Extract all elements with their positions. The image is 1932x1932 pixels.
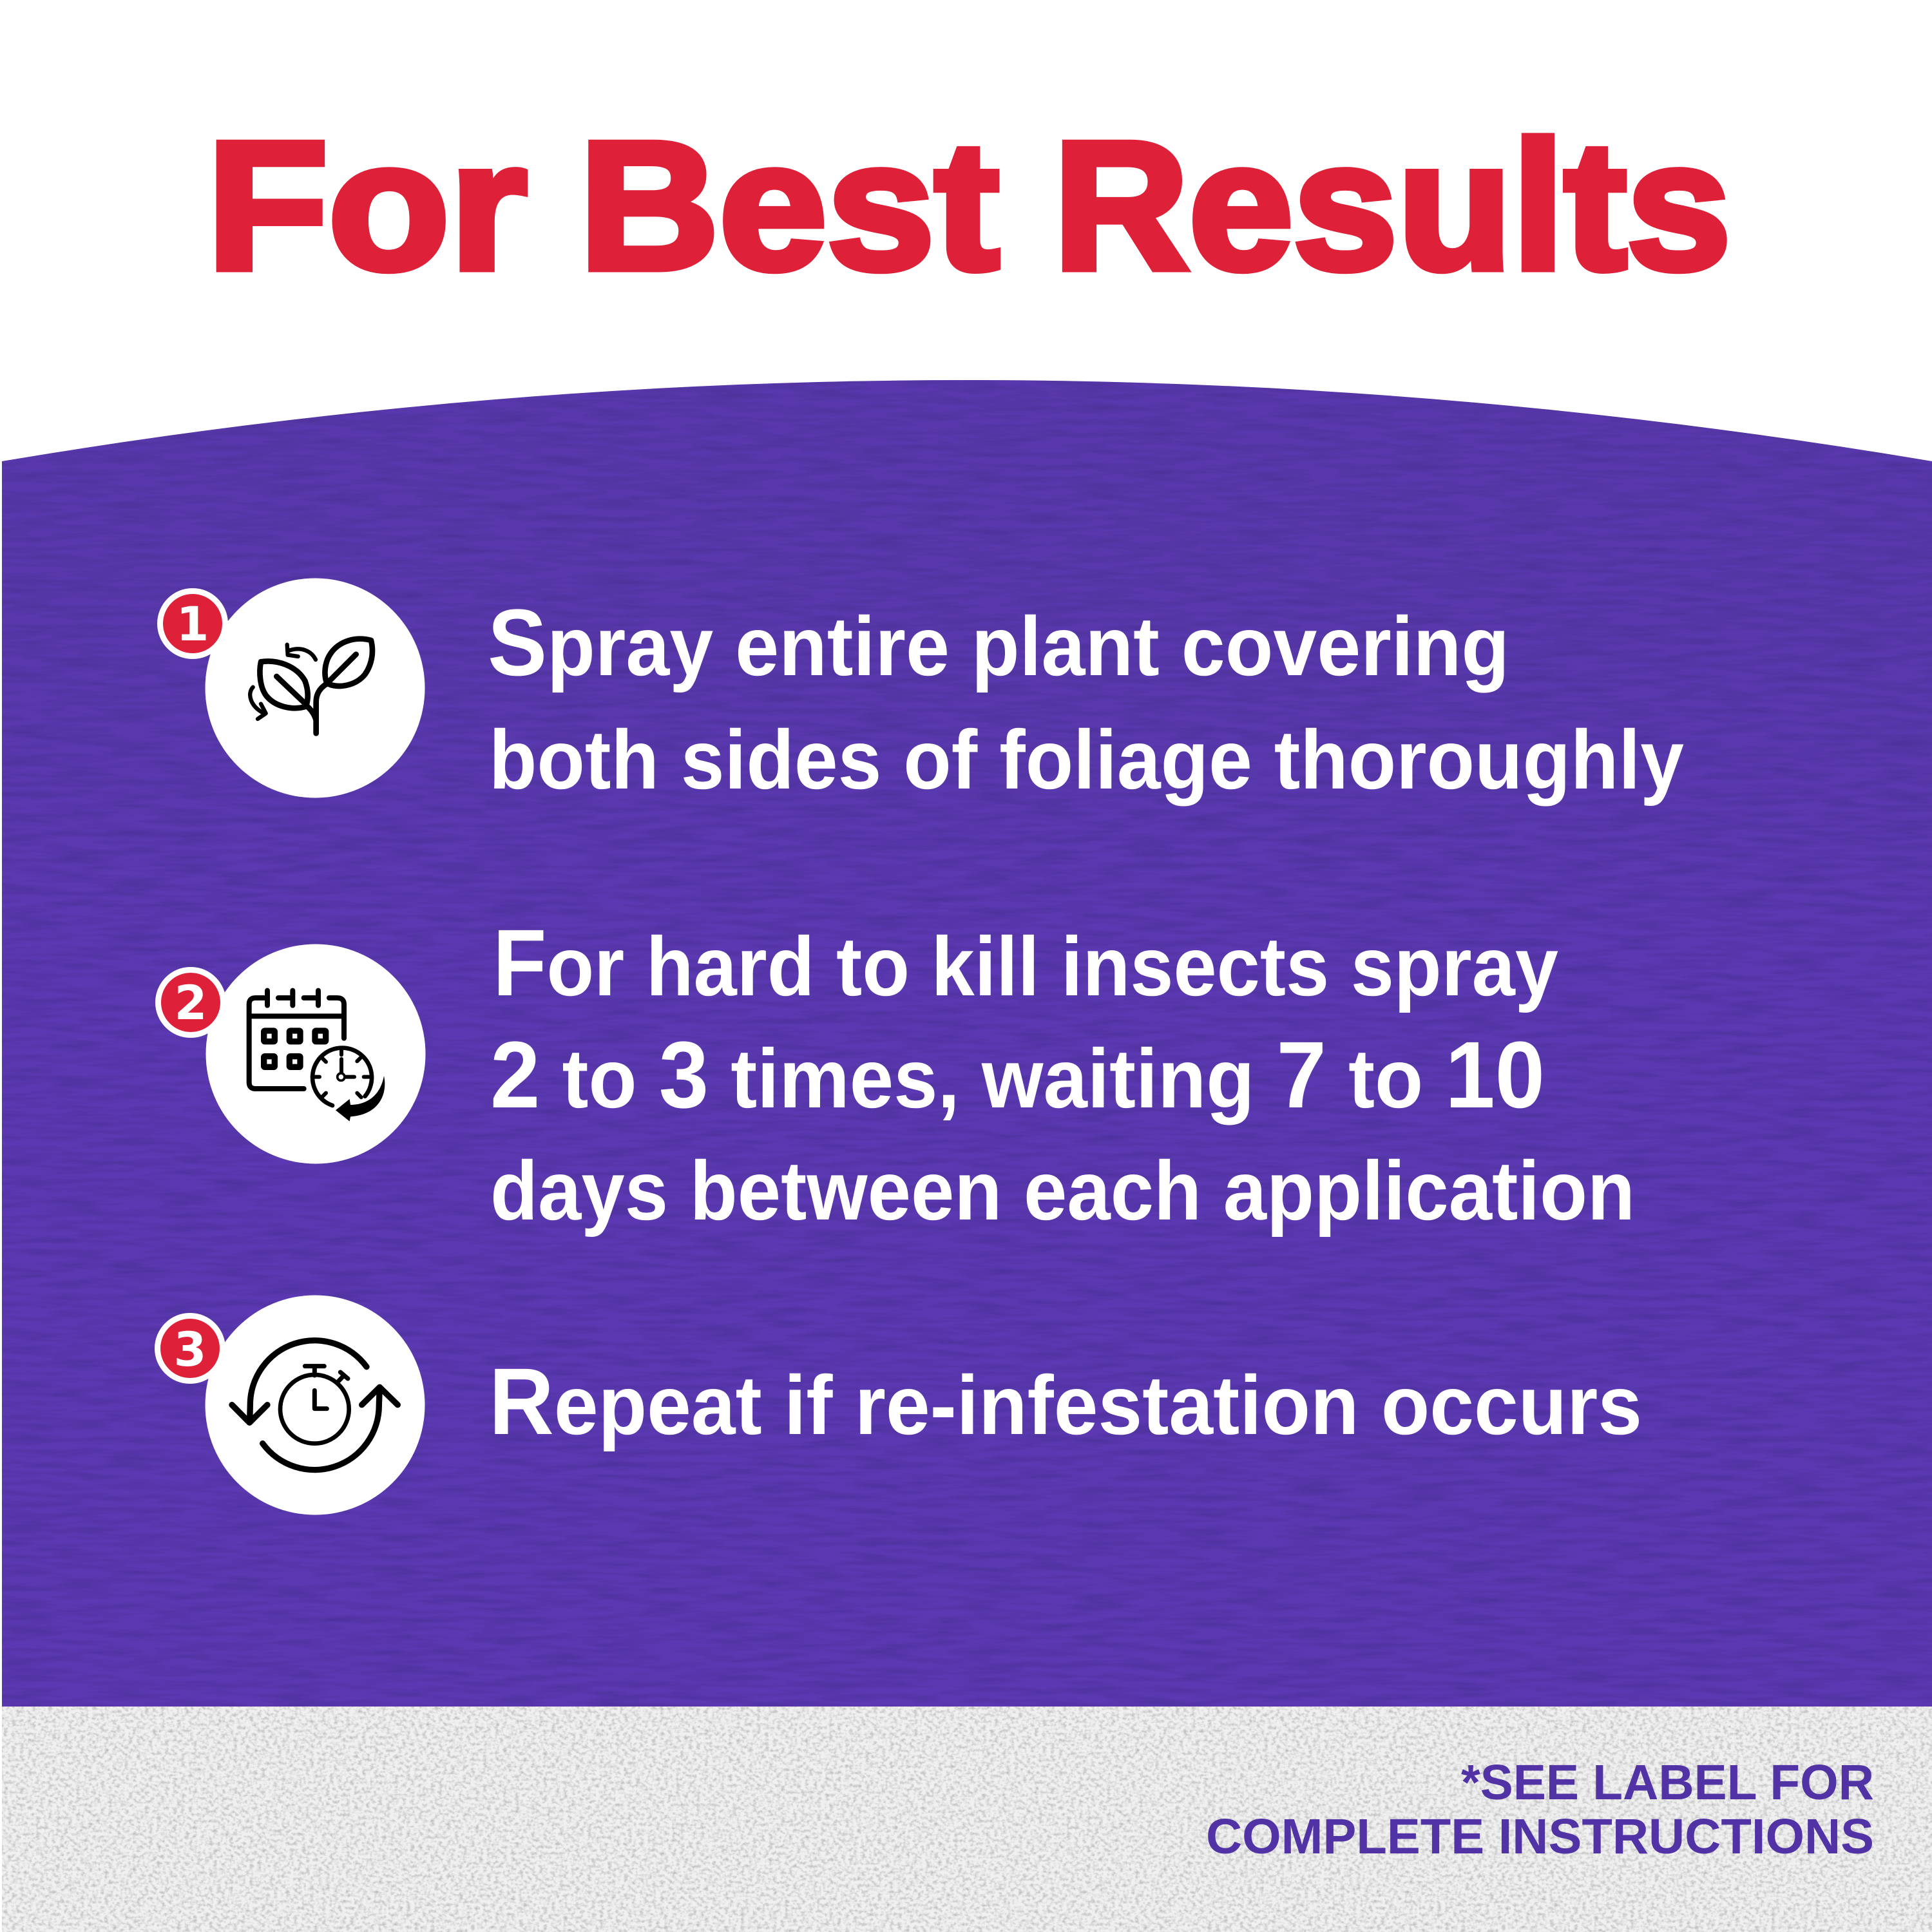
panel: purple instructions background [0, 374, 1932, 1707]
step 3 text: Repeat if re-infestation occurs [489, 1349, 1642, 1455]
step 2 text: For hard to kill insects spray [493, 910, 1558, 1016]
icon circle 1 [205, 579, 425, 798]
title: Best [579, 104, 999, 307]
footnote [1206, 1755, 1874, 1864]
step 1 text: Spray entire plant covering [488, 590, 1509, 696]
footnote: *SEE LABEL FOR [1461, 1755, 1874, 1810]
badge 1: 1 [177, 597, 209, 652]
title [207, 104, 1731, 307]
panel: textured footer background [2, 1707, 1932, 1932]
badge 1 [157, 588, 228, 659]
icon: calendar with clock [249, 991, 385, 1122]
title: Results [1053, 104, 1731, 307]
step 1 [157, 579, 1684, 807]
footnote: COMPLETE INSTRUCTIONS [1206, 1809, 1874, 1864]
step 3 [155, 1295, 1642, 1515]
step 1 text [488, 590, 1684, 807]
step 2 text: 2 to 3 times, waiting 7 to 10 [490, 1022, 1545, 1128]
step 2 [155, 910, 1635, 1238]
title: For [207, 104, 527, 307]
icon: leaves with rotation arrows [250, 639, 372, 733]
step 2 text: days between each application [490, 1143, 1635, 1238]
icon circle 2 [206, 944, 425, 1163]
badge 2: 2 [175, 976, 207, 1031]
step 1 text: both sides of foliage thoroughly [489, 713, 1684, 807]
step 2 text [490, 910, 1635, 1238]
icon: stopwatch with repeat arrows [232, 1341, 397, 1470]
badge 3 [155, 1313, 225, 1384]
badge 3: 3 [174, 1323, 206, 1377]
badge 2 [155, 967, 226, 1038]
icon circle 3 [205, 1295, 425, 1515]
